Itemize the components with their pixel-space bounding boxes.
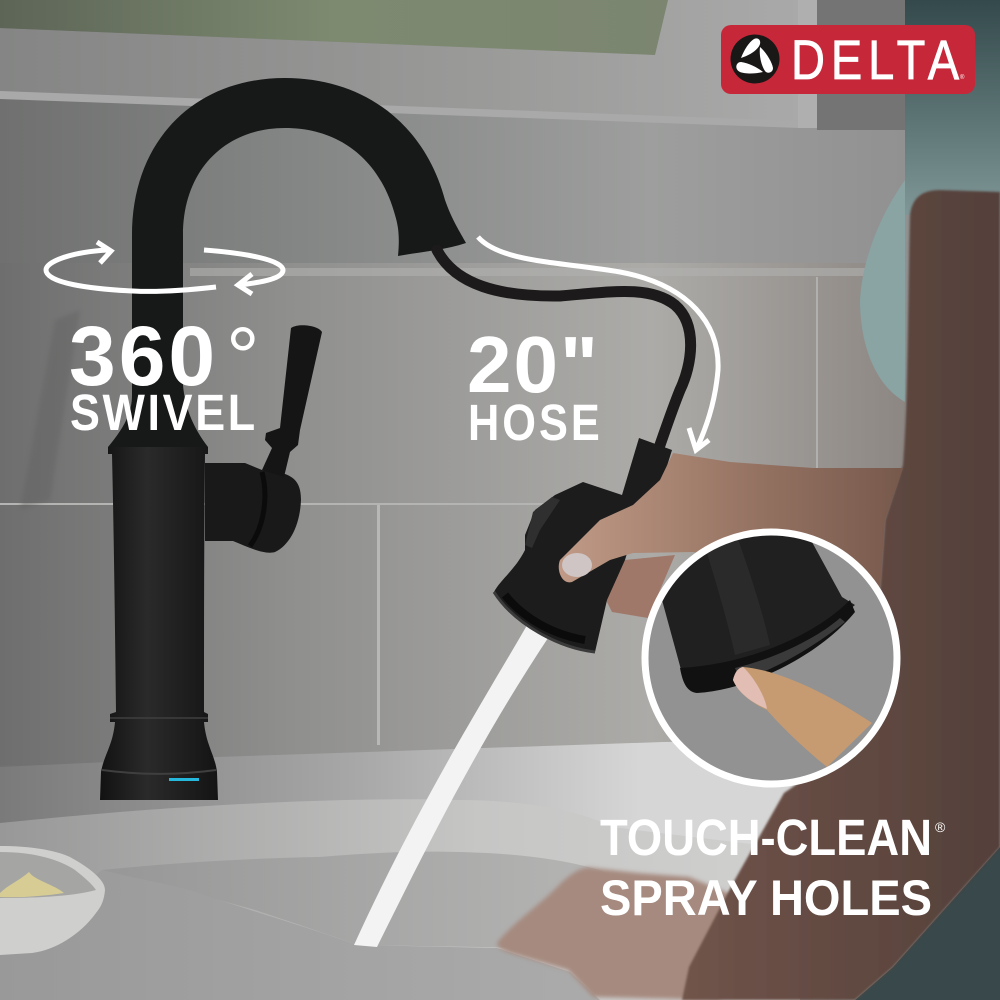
label: touch-clean spray holes: TOUCH-CLEAN bbox=[600, 809, 932, 866]
faucet highlights bbox=[102, 472, 265, 774]
label: 20 inch hose bbox=[467, 320, 603, 452]
label: 20 inch hose: 20" bbox=[467, 320, 600, 409]
inset circle: touch-clean spray holes bbox=[645, 520, 897, 784]
label: 360 swivel bbox=[69, 309, 260, 442]
person: lower hand in sink bbox=[497, 868, 745, 1000]
label: 360 swivel: SWIVEL bbox=[70, 385, 258, 442]
label: touch-clean spray holes bbox=[600, 809, 946, 926]
arrow: 360 swivel bbox=[46, 242, 283, 294]
bowl on counter bbox=[0, 846, 105, 955]
logo: Delta bbox=[721, 25, 975, 94]
label: touch-clean spray holes: SPRAY HOLES bbox=[600, 870, 932, 926]
hand: fingers behind spray head bbox=[606, 555, 675, 618]
counter and sink bbox=[0, 740, 800, 1000]
logo: Delta: DELTA bbox=[791, 28, 965, 91]
faucet: body, spout, handle bbox=[100, 78, 466, 800]
hand holding spray head bbox=[559, 453, 903, 590]
arrow: hose bbox=[478, 237, 718, 450]
person: shirt bbox=[860, 0, 1000, 402]
label: 360 swivel: ° bbox=[226, 310, 260, 404]
logo: Delta: ® bbox=[960, 74, 965, 81]
person: arm and torso bbox=[682, 190, 1000, 1000]
label: touch-clean spray holes: ® bbox=[935, 819, 946, 835]
spray head bbox=[494, 438, 672, 652]
label: 20 inch hose: HOSE bbox=[468, 395, 603, 452]
water stream bbox=[354, 620, 552, 947]
label: 360 swivel: 360 bbox=[69, 309, 218, 403]
braided hose bbox=[437, 250, 691, 445]
